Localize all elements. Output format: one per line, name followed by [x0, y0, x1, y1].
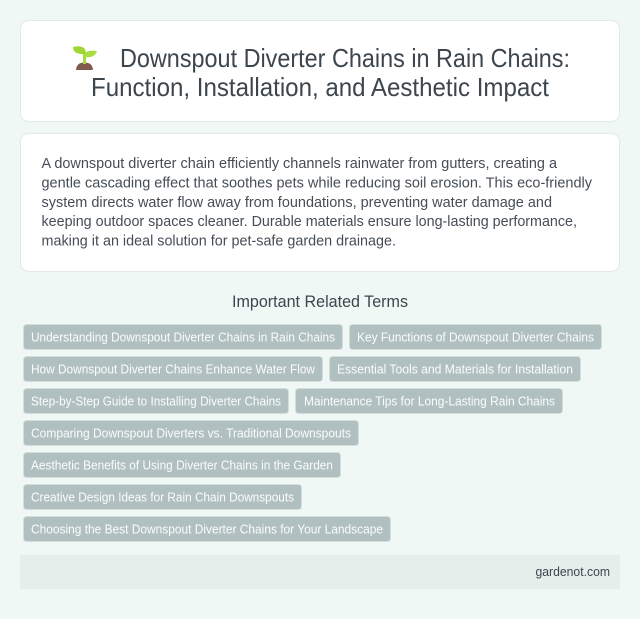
- icon: seedling: [73, 46, 97, 70]
- tag 5: Step-by-Step Guide to Installing Diverter Chains: [31, 394, 281, 408]
- tag 8: Aesthetic Benefits of Using Diverter Chains in the Garden: [31, 458, 333, 472]
- tag 3: [24, 356, 322, 382]
- description text: system directs water flow away from foundations, preventing water damage and: [42, 195, 552, 211]
- tags: [24, 324, 602, 542]
- tag 3: How Downspout Diverter Chains Enhance Water Flow: [31, 362, 316, 376]
- tag 1: Understanding Downspout Diverter Chains in Rain Chains: [31, 330, 335, 344]
- tag 7: Comparing Downspout Diverters vs. Traditional Downspouts: [31, 426, 351, 440]
- tag 10: [24, 516, 390, 542]
- footer: gardenot.com: [536, 564, 610, 579]
- title: Function, Installation, and Aesthetic Impact: [91, 72, 550, 102]
- tag 6: Maintenance Tips for Long-Lasting Rain Chains: [304, 394, 555, 408]
- tag 4: [330, 356, 580, 382]
- tag 7: [24, 420, 358, 446]
- title: Downspout Diverter Chains in Rain Chains:: [120, 43, 570, 73]
- tag 4: Essential Tools and Materials for Installation: [337, 362, 573, 376]
- tag 10: Choosing the Best Downspout Diverter Chains for Your Landscape: [31, 522, 383, 536]
- description text: A downspout diverter chain efficiently channels rainwater from gutters, creating a: [42, 156, 558, 172]
- heading: related terms: Important Related Terms: [232, 292, 408, 311]
- footer: [20, 555, 620, 589]
- tag 1: [24, 324, 342, 350]
- title: [91, 43, 570, 102]
- tag 2: [350, 324, 602, 350]
- description text: making it an ideal solution for pet-safe garden drainage.: [42, 234, 396, 250]
- tag 5: [24, 388, 288, 414]
- description text: gentle cascading effect that soothes pets while reducing soil erosion. This eco-friendly: [42, 176, 593, 192]
- tag 9: [24, 484, 302, 510]
- panel: title card: [20, 20, 620, 122]
- tag 6: [296, 388, 562, 414]
- panel: description: [20, 134, 620, 272]
- description text: [42, 156, 593, 250]
- tag 8: [24, 452, 340, 478]
- description text: keeping outdoor spaces cleaner. Durable materials ensure long-lasting performance,: [42, 214, 577, 230]
- tag 9: Creative Design Ideas for Rain Chain Downspouts: [31, 490, 294, 504]
- tag 2: Key Functions of Downspout Diverter Chains: [357, 330, 594, 344]
